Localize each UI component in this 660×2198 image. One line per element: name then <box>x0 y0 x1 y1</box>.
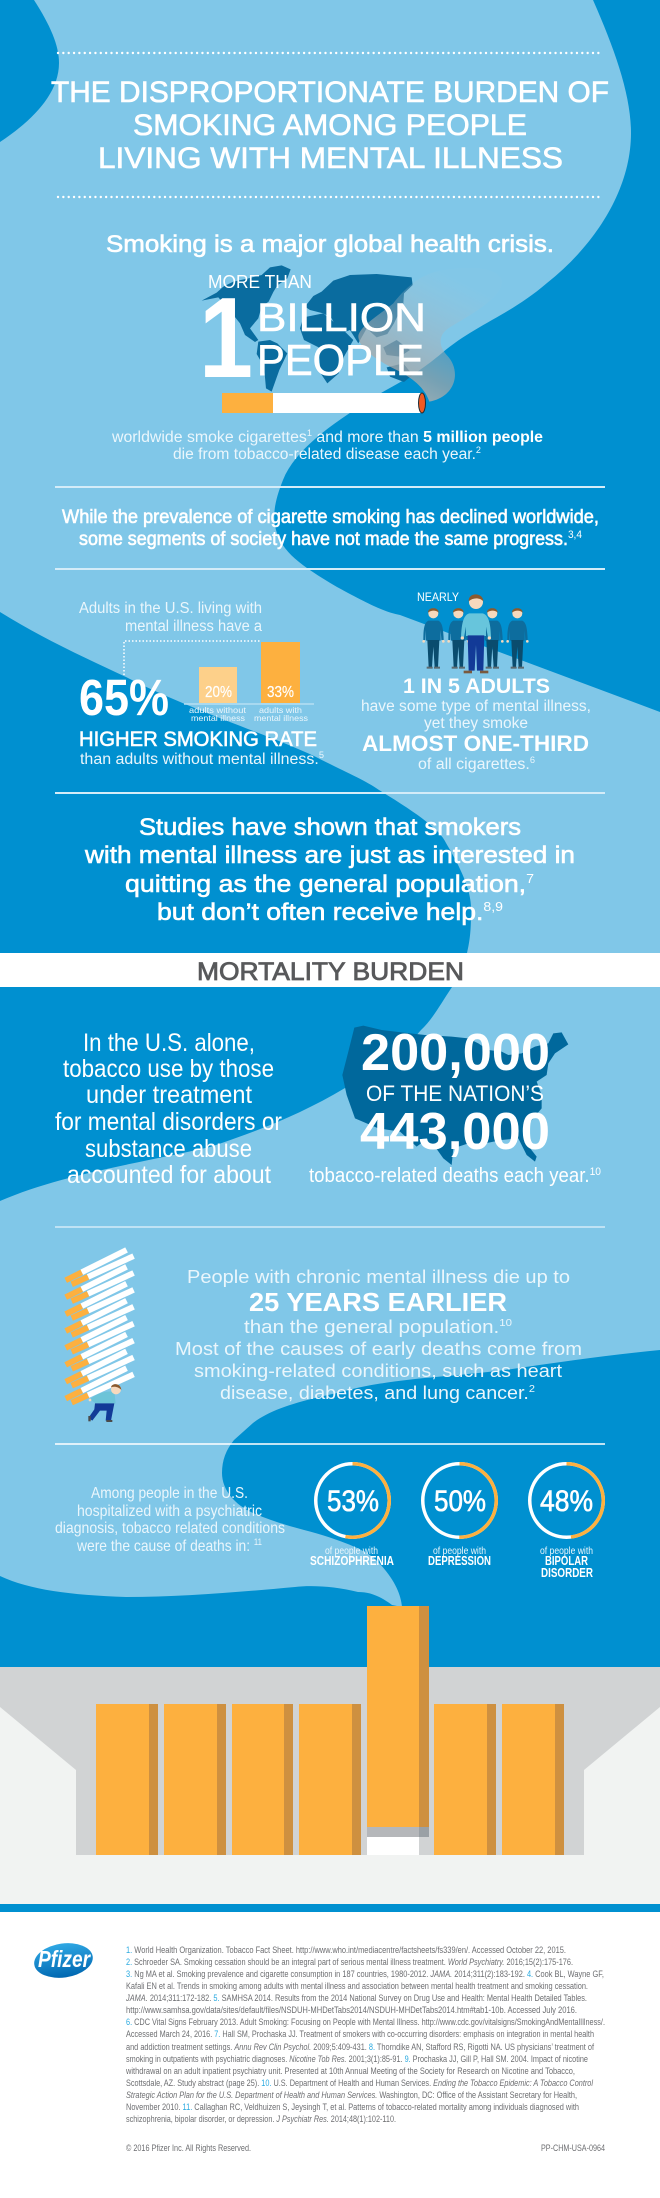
references: http://www.samhsa.gov/data/sites/default/files/NSDUH-MHDetTabs2014/NSDUH-MHDetTabs2014.htm#tab1-10b. Accessed July 2016. <box>126 2005 577 2015</box>
stat: 200,000 of 443,000: OF THE NATION’S <box>366 1081 544 1106</box>
text: in the U.S. alone: substance abuse <box>85 1135 252 1163</box>
text: some type of mental illness: have some type of mental illness, <box>361 698 591 715</box>
references: withdrawal on an adult inpatient psychiatry unit. Presented at 10th Annual Meeting of the Society for Research on Nicotine and Tobacco, <box>125 2066 575 2076</box>
text: studies callout: Studies have shown that smokers <box>139 814 521 841</box>
heading: almost one-third: ALMOST ONE-THIRD <box>362 731 589 756</box>
text: worldwide smokers: 5 million people <box>423 429 543 446</box>
text: of all cigarettes: 6 <box>530 755 535 765</box>
smoke plume <box>358 268 502 402</box>
title <box>51 76 609 175</box>
stat: more than 1 billion people: BILLION <box>257 296 426 340</box>
chart: ring 48% bipolar disorder: BIPOLAR <box>545 1554 588 1568</box>
text: prevalence statement: some segments of society have not made the same progress. <box>79 528 611 550</box>
footer code: PP-CHM-USA-0964 <box>541 2143 605 2153</box>
text: than adults without: than adults without mental illness. <box>80 751 312 768</box>
references: November 2010. 11. Callaghan RC, Veldhuizen S, Jeysingh T, et al. Patterns of tobacco-related mortality among individuals diagnosed with <box>126 2102 579 2112</box>
header dotted rules <box>58 53 603 197</box>
bar chart: mental illness <box>254 713 308 723</box>
title: SMOKING AMONG PEOPLE <box>133 109 527 142</box>
text: tobacco-related deaths: tobacco-related deaths each year. <box>309 1165 610 1187</box>
rule <box>55 1226 605 1228</box>
label: nearly: NEARLY <box>417 590 459 604</box>
chart: ring 53% schizophrenia <box>310 1464 394 1568</box>
blue footer band <box>0 1904 660 1912</box>
text: hospitalized: were the cause of deaths in: <box>77 1538 277 1555</box>
chart: ring 50% depression: DEPRESSION <box>428 1554 491 1568</box>
icon: man carrying cigarettes <box>64 1247 135 1422</box>
bar chart <box>184 642 314 723</box>
chart: ring 50% depression: 50% <box>434 1485 486 1518</box>
text: worldwide smokers: 1 <box>307 428 312 438</box>
text: studies callout: 8,9 <box>483 899 503 914</box>
icon: kneeling man <box>88 1384 121 1422</box>
text: 25 years earlier <box>175 1267 582 1403</box>
text: hospitalized: diagnosis, tobacco related conditions <box>55 1520 285 1537</box>
lower section light panel <box>0 987 660 1667</box>
text: hospitalized <box>55 1485 285 1555</box>
stat: 200,000 of 443,000: 443,000 <box>360 1103 550 1161</box>
cigarette pack box <box>0 1667 660 1904</box>
heading: 1 in 5 adults: 1 IN 5 ADULTS <box>403 675 550 698</box>
text: 25 years earlier: smoking-related conditions, such as heart <box>194 1361 562 1381</box>
stat: more than 1 billion people: MORE THAN <box>208 272 312 292</box>
references: and addiction treatment settings. Annu Rev Clin Psychol. 2009;5:409-431. 8. Thorndike AN, Stafford RS, Rigotti NA. US physicians’ treatment of <box>126 2042 594 2052</box>
stat: more than 1 billion people <box>199 272 426 402</box>
stat: 65%: 65% <box>79 669 169 726</box>
right dark wave <box>274 0 660 712</box>
text: hospitalized: hospitalized with a psychiatric <box>77 1503 262 1520</box>
heading: global health crisis: Smoking is a major global health crisis. <box>106 231 554 258</box>
heading: higher smoking rate: HIGHER SMOKING RATE <box>79 728 317 751</box>
top-left dark wave <box>0 0 59 142</box>
text: 25 years earlier: People with chronic mental illness die up to <box>187 1267 570 1287</box>
icon: five people <box>422 594 529 673</box>
text: studies callout: quitting as the general population, <box>125 871 493 898</box>
references: 2. Schroeder SA. Smoking cessation should be an integral part of serious mental illness treatment. World Psychiatry. 2016;15(2):175-176. <box>126 1957 573 1967</box>
chart: ring 48% bipolar disorder: 48% <box>540 1485 593 1518</box>
text: studies callout: 7 <box>526 871 534 886</box>
stat: 200,000 of 443,000: 200,000 <box>361 1024 550 1082</box>
panel: higher smoking rate <box>79 600 324 768</box>
text: adults intro: mental illness have a <box>125 618 262 635</box>
icon: US map <box>342 1026 568 1165</box>
text: prevalence statement <box>62 506 599 550</box>
heading: mortality burden: MORTALITY BURDEN <box>197 958 464 986</box>
references: schizophrenia, bipolar disorder, or depression. J Psychiatr Res. 2014;48(1):102-110. <box>126 2114 396 2124</box>
text: adults intro: Adults in the U.S. living with <box>79 600 262 617</box>
upper-left dark wave <box>0 987 452 1201</box>
text: prevalence statement: 3,4 <box>568 529 582 541</box>
chart: ring 53% schizophrenia: of people with <box>325 1545 378 1557</box>
text: adults intro <box>79 600 262 635</box>
text: in the U.S. alone: for mental disorders or <box>55 1108 282 1136</box>
chart: ring 48% bipolar disorder <box>530 1464 603 1580</box>
lower-left dark wave <box>0 612 471 953</box>
text: some type of mental illness <box>361 698 591 732</box>
text: studies callout: but don’t often receive help. <box>157 899 458 926</box>
icon: cigarette stack <box>64 1247 135 1405</box>
text: 25 years earlier: than the general population. <box>244 1317 467 1337</box>
text: hospitalized: 11 <box>254 1537 262 1547</box>
stat: 200,000 of 443,000 <box>360 1024 550 1161</box>
text: in the U.S. alone: under treatment <box>86 1081 252 1109</box>
references: 1. World Health Organization. Tobacco Fact Sheet. http://www.who.int/mediacentre/factsheets/fs339/en/. Accessed October 22, 2015. <box>126 1945 566 1955</box>
text: some type of mental illness: yet they smoke <box>424 715 528 732</box>
bar chart: adults with <box>259 705 302 715</box>
text: studies callout: with mental illness are just as interested in <box>84 842 575 869</box>
text: 25 years earlier: Most of the causes of early deaths come from <box>175 1339 582 1359</box>
text: worldwide smokers: worldwide smoke cigarettes <box>112 429 302 446</box>
chart: ring 48% bipolar disorder: of people with <box>540 1545 593 1557</box>
dotted bracket <box>124 641 261 675</box>
chart: ring 53% schizophrenia: SCHIZOPHRENIA <box>310 1554 394 1568</box>
stat: more than 1 billion people: 1 <box>199 275 253 402</box>
panel: 1 in 5 adults <box>361 590 591 773</box>
chart: ring 53% schizophrenia: 53% <box>327 1485 379 1518</box>
lower dark wave with smoke tail <box>0 1350 660 1667</box>
text: in the U.S. alone: tobacco use by those <box>63 1055 274 1083</box>
text: in the U.S. alone: In the U.S. alone, <box>83 1029 255 1057</box>
references: 3. Ng MA et al. Smoking prevalence and cigarette consumption in 187 countries, 1980-2012. JAMA. 2014;311(2):183-192. 4. Cook BL, Wayne GF, <box>126 1969 604 1979</box>
text: 25 years earlier: 10 <box>499 1318 512 1329</box>
top section light panel <box>0 0 660 953</box>
bar chart: adults without <box>189 705 247 715</box>
references: Strategic Action Plan for the U.S. Department of Health and Human Services. Washington, DC: Office of the Assistant Secretary for Health, <box>126 2090 577 2100</box>
logo: Pfizer <box>32 1940 95 1981</box>
text: worldwide smokers: die from tobacco-related disease each year. <box>173 446 474 463</box>
stat: more than 1 billion people: PEOPLE <box>257 336 424 385</box>
title: THE DISPROPORTIONATE BURDEN OF <box>51 76 609 109</box>
chart: ring 50% depression: of people with <box>433 1545 486 1557</box>
text: 25 years earlier: 25 YEARS EARLIER <box>249 1287 507 1317</box>
chart: ring 50% depression <box>423 1464 496 1568</box>
footer copyright: © 2016 Pfizer Inc. All Rights Reserved. <box>126 2143 251 2153</box>
logo: Pfizer: Pfizer <box>38 1946 91 1972</box>
text: prevalence statement: While the prevalence of cigarette smoking has declined worldwide, <box>62 506 599 528</box>
solid rules <box>55 487 605 793</box>
text: in the U.S. alone: accounted for about <box>67 1161 271 1189</box>
text: worldwide smokers <box>111 428 543 463</box>
text: studies callout <box>84 814 575 926</box>
text: tobacco-related deaths: 10 <box>590 1166 601 1178</box>
references: JAMA. 2014;311:172-182. 5. SAMHSA 2014. Results from the 2014 National Survey on Drug Use and Health: Mental Health Detailed Tables. <box>125 1993 587 2003</box>
title: LIVING WITH MENTAL ILLNESS <box>98 142 563 175</box>
text: 25 years earlier: disease, diabetes, and lung cancer. <box>220 1383 502 1403</box>
references <box>125 1945 605 2124</box>
cigarette <box>222 393 426 413</box>
text: in the U.S. alone <box>55 1029 282 1189</box>
text: of all cigarettes: of all cigarettes. <box>418 756 527 773</box>
bar chart: mental illness <box>191 713 245 723</box>
references: Scottsdale, AZ. Study abstract (page 25). 10. U.S. Department of Health and Human Services. Ending the Tobacco Epidemic: A Tobacco Control <box>126 2078 594 2088</box>
text: than adults without: 5 <box>319 750 324 760</box>
text: worldwide smokers: 2 <box>476 445 481 455</box>
references: smoking in outpatients with psychiatric diagnoses. Nicotine Tob Res. 2001;3(1):85-91. 9. Prochaska JJ, Gill P, Hall SM. 2004. Impact of nicotine <box>126 2054 588 2064</box>
chart: ring 48% bipolar disorder: DISORDER <box>541 1566 593 1580</box>
icon: world map <box>202 265 413 392</box>
bar chart: 20% <box>205 684 232 701</box>
cigarettes in pack <box>96 1704 564 1855</box>
bar chart: 33% <box>267 684 294 701</box>
text: worldwide smokers: and more than <box>312 429 423 446</box>
rule <box>55 1443 605 1445</box>
text: 25 years earlier: 2 <box>529 1384 535 1395</box>
text: hospitalized: Among people in the U.S. <box>91 1485 248 1502</box>
raised cigarette <box>367 1606 429 1855</box>
